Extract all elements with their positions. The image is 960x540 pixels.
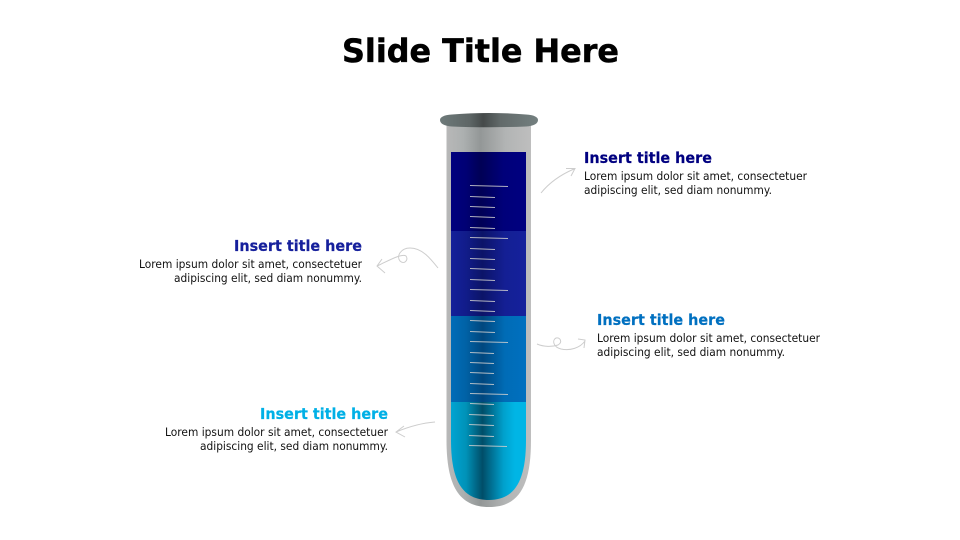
- callout: right lower: [537, 311, 820, 359]
- graduation marks: [469, 186, 508, 446]
- tube glass: [446, 122, 531, 507]
- tube cap: [440, 113, 538, 127]
- arrow: [541, 168, 575, 193]
- heading: Insert title here: [597, 311, 725, 329]
- heading: Insert title here: [234, 237, 362, 255]
- callout: left upper: adipiscing elit, sed diam nonummy.: [174, 271, 362, 285]
- callout: left bottom: [165, 405, 435, 453]
- liquid band: mid blue: [451, 316, 526, 402]
- body text: Lorem ipsum dolor sit amet, consectetuer: [139, 257, 362, 271]
- body text: Lorem ipsum dolor sit amet, consectetuer: [597, 331, 820, 345]
- callout: left bottom: adipiscing elit, sed diam nonummy.: [200, 439, 388, 453]
- callout: top right: adipiscing elit, sed diam nonummy.: [584, 183, 772, 197]
- arrow: [377, 248, 438, 273]
- liquid band: blue: [451, 231, 526, 316]
- callout: top right: [541, 149, 807, 197]
- title: Slide Title Here: [342, 32, 619, 70]
- callout: left upper: [139, 237, 438, 285]
- heading: Insert title here: [260, 405, 388, 423]
- heading: Insert title here: [584, 149, 712, 167]
- arrow: [396, 422, 435, 437]
- body text: Lorem ipsum dolor sit amet, consectetuer: [165, 425, 388, 439]
- liquid band: navy: [451, 152, 526, 231]
- body text: Lorem ipsum dolor sit amet, consectetuer: [584, 169, 807, 183]
- test tube: [440, 113, 538, 507]
- arrow: [537, 338, 585, 350]
- liquid band: cyan: [451, 402, 526, 500]
- callout: right lower: adipiscing elit, sed diam nonummy.: [597, 345, 785, 359]
